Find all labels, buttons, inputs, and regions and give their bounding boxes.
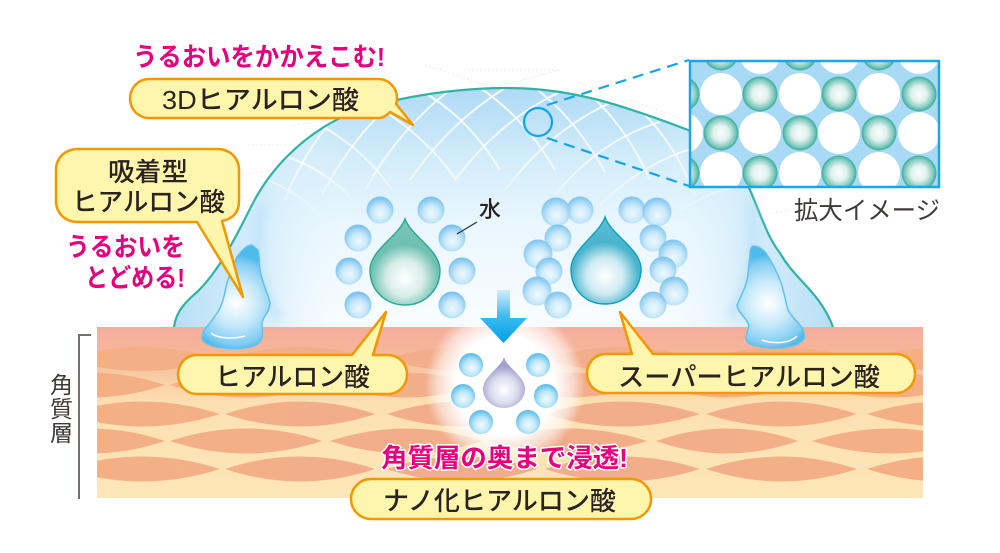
text: retains moisture [66, 232, 185, 293]
callout: 3D hyaluronic acid [130, 79, 413, 125]
text: retains moisture: うるおいを [66, 232, 185, 262]
side shading inside dome [257, 205, 753, 320]
callout: super hyaluronic acid: スーパーヒアルロン酸 [618, 362, 880, 392]
callout: adsorbing hyaluronic acid [56, 149, 243, 297]
callout: hyaluronic acid: ヒアルロン酸 [215, 362, 370, 392]
label: water [457, 197, 501, 234]
group: water bubbles around hyaluronic acid [336, 196, 476, 318]
callout: adsorbing hyaluronic acid: ヒアルロン酸 [72, 187, 225, 217]
icon: super hyaluronic acid drop [571, 217, 641, 304]
zoom lens circle and dashed lines [524, 60, 689, 186]
callout: 3D hyaluronic acid: 3Dヒアルロン酸 [162, 85, 359, 115]
label: magnified image: 拡大イメージ [794, 197, 940, 225]
panel: magnified image [688, 60, 940, 188]
icon: right adsorbing gel [737, 246, 804, 348]
panel: stratum corneum skin layer [97, 327, 923, 498]
label: stratum corneum: 層 [50, 420, 73, 446]
label: stratum corneum: 角 [50, 372, 73, 398]
mesh lines on dome [268, 89, 733, 202]
arrow: penetration down [480, 290, 527, 343]
callout: hyaluronic acid [178, 312, 407, 394]
panel: 3D hyaluronic acid dome [174, 88, 833, 327]
label: stratum corneum: 質 [50, 396, 73, 422]
callout: super hyaluronic acid [587, 312, 915, 393]
group: water bubbles around super hyaluronic acid [522, 196, 688, 318]
callout: nano hyaluronic acid [351, 479, 651, 519]
callout: adsorbing hyaluronic acid: 吸着型 [108, 157, 188, 187]
text: retains moisture: とどめる! [85, 263, 185, 293]
heading: holds moisture: うるおいをかかえこむ! [133, 42, 385, 72]
label: water: 水 [479, 197, 501, 222]
group: nano water bubbles [451, 353, 558, 434]
icon: left adsorbing gel [202, 245, 270, 349]
text: penetrates deep into stratum corneum: 角質層の奥まで浸透! [381, 443, 628, 473]
bracket: stratum corneum [79, 335, 91, 499]
label: stratum corneum [50, 372, 73, 446]
icon: nano hyaluronic acid drop [483, 357, 525, 408]
icon: hyaluronic acid drop [370, 219, 440, 305]
callout: nano hyaluronic acid: ナノ化ヒアルロン酸 [383, 486, 616, 516]
faint mesh lines outside dome [240, 65, 790, 222]
